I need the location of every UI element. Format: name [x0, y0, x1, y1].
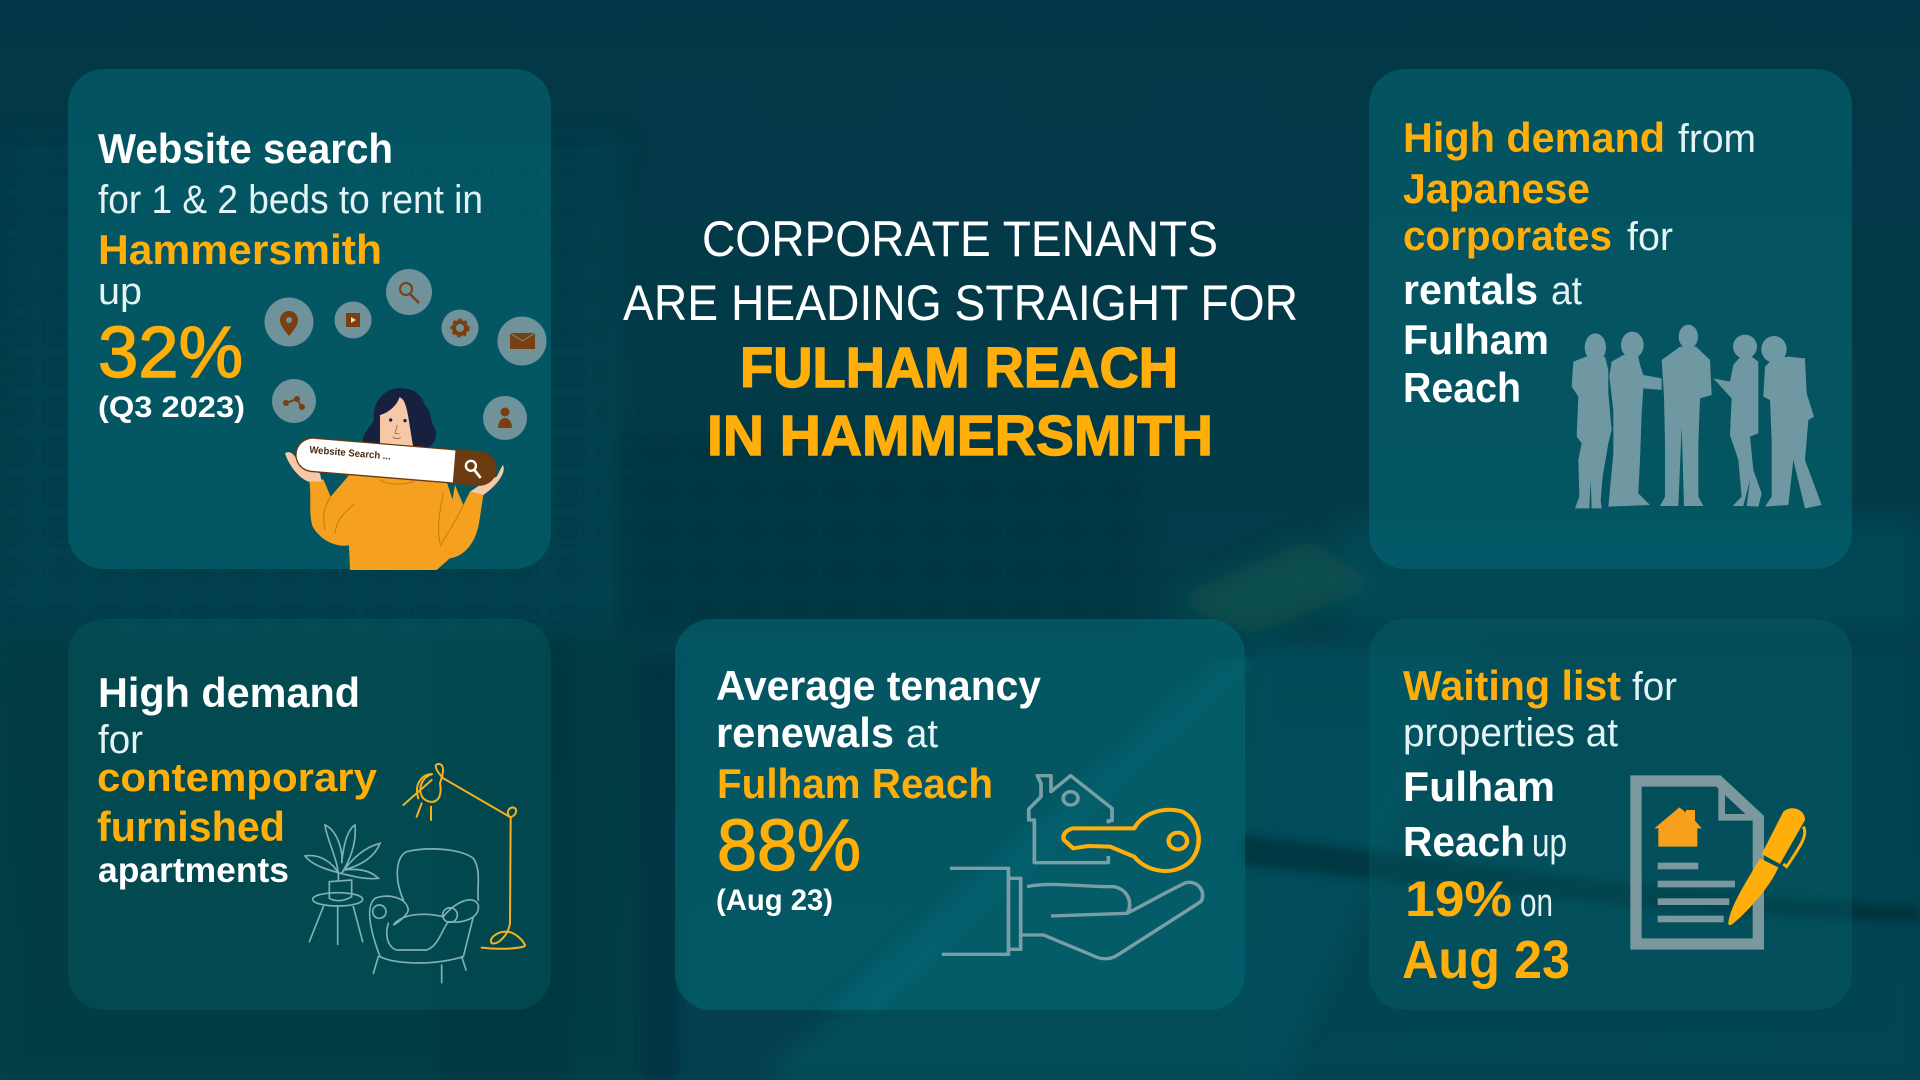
icon: document and pen — [1636, 781, 1805, 944]
text: furnished apartments statement: High demand — [98, 669, 360, 716]
illustration: woman holding search bar — [285, 388, 504, 570]
text: waiting list statistic: up — [1532, 821, 1567, 865]
text: website search statistic: 32% — [98, 313, 243, 393]
title: corporate tenants headline: IN HAMMERSMITH — [707, 404, 1213, 468]
icon: line-art lamp — [403, 764, 525, 949]
panel: website search — [68, 69, 551, 570]
text: tenancy renewals statistic: Average tenancy — [716, 662, 1042, 709]
text: Japanese corporates statement: rentals — [1403, 266, 1538, 313]
text: website search statistic — [98, 125, 483, 424]
text: furnished apartments statement: furnished — [97, 803, 285, 850]
text: website search statistic: up — [98, 271, 142, 313]
title: corporate tenants headline: CORPORATE TENANTS — [702, 211, 1218, 267]
text: waiting list statistic: properties at — [1403, 711, 1618, 755]
text: tenancy renewals statistic: at — [906, 712, 938, 756]
text: Japanese corporates statement: from — [1678, 117, 1756, 161]
title: corporate tenants headline: FULHAM REACH — [740, 336, 1178, 400]
text: website search statistic: (Q3 2023) — [98, 391, 245, 424]
text: waiting list statistic: 19% — [1405, 871, 1512, 927]
text: waiting list statistic: Fulham — [1403, 763, 1555, 810]
text: Japanese corporates statement: Reach — [1403, 364, 1521, 411]
text: waiting list statistic: on — [1520, 881, 1553, 925]
icon: business people silhouettes — [1572, 325, 1822, 508]
text: waiting list statistic: for — [1632, 665, 1677, 709]
text: Japanese corporates statement: High demand — [1403, 114, 1665, 161]
title: corporate tenants headline: ARE HEADING STRAIGHT FOR — [623, 275, 1298, 331]
text: Japanese corporates statement: Japanese — [1403, 165, 1590, 212]
text: Japanese corporates statement: Fulham — [1403, 316, 1549, 363]
text: furnished apartments statement: apartments — [98, 851, 289, 890]
text: Japanese corporates statement: at — [1551, 269, 1582, 313]
illustration: woman holding search bar: Website Search ... — [309, 445, 391, 463]
text: tenancy renewals statistic: renewals — [716, 709, 894, 756]
text: tenancy renewals statistic — [716, 662, 1042, 917]
text: waiting list statistic — [1402, 662, 1677, 990]
icon: line-art plant and armchair — [305, 825, 478, 983]
text: furnished apartments statement — [97, 669, 378, 890]
panel: tenancy renewals — [675, 619, 1245, 1010]
text: Japanese corporates statement — [1403, 114, 1756, 411]
text: tenancy renewals statistic: Fulham Reach — [717, 760, 993, 807]
text: website search statistic: for 1 & 2 beds to rent in — [98, 178, 483, 222]
panel: Japanese corporates demand — [1369, 69, 1852, 569]
panel: waiting list — [1369, 619, 1852, 1010]
text: waiting list statistic: Reach — [1403, 818, 1525, 865]
text: furnished apartments statement: for — [98, 718, 143, 762]
text: waiting list statistic: Aug 23 — [1402, 930, 1570, 990]
text: Japanese corporates statement: for — [1627, 215, 1673, 259]
text: waiting list statistic: Waiting list — [1403, 662, 1621, 709]
text: furnished apartments statement: contemporary — [97, 756, 378, 800]
icon: floating search icons — [264, 269, 546, 440]
text: tenancy renewals statistic: (Aug 23) — [716, 884, 833, 917]
text: website search statistic: Hammersmith — [98, 226, 382, 273]
text: Japanese corporates statement: corporates — [1403, 212, 1612, 259]
panel: contemporary furnished demand — [68, 619, 551, 1010]
title: corporate tenants headline — [623, 211, 1298, 468]
text: website search statistic: Website search — [98, 125, 393, 172]
text: tenancy renewals statistic: 88% — [717, 806, 861, 886]
icon: hand holding house key — [942, 776, 1203, 959]
